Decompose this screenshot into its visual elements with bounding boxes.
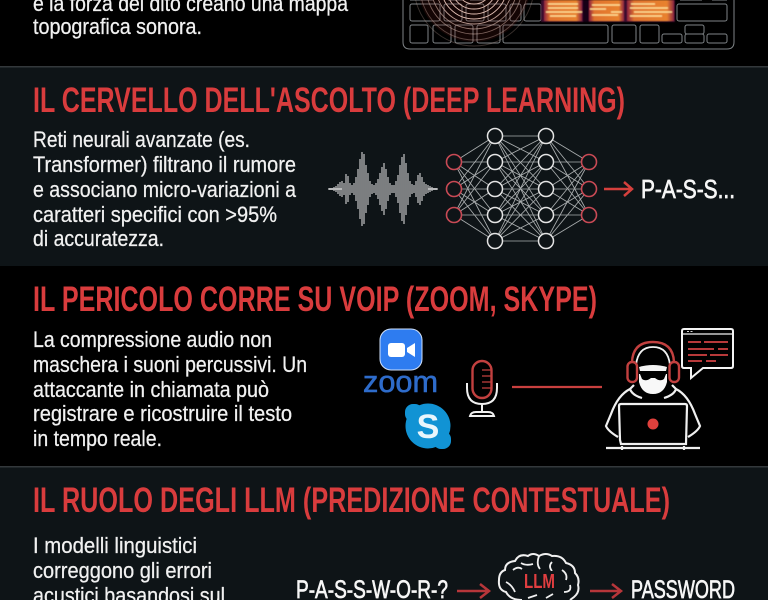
panel: topografia sonora bbox=[0, 0, 768, 66]
fingerprint bbox=[414, 0, 534, 46]
text block: attaccante in chiamata può bbox=[33, 377, 269, 402]
text block: topografia bbox=[33, 0, 349, 39]
text block bbox=[33, 127, 297, 251]
arrow bbox=[590, 584, 621, 598]
chart: neural network bbox=[446, 128, 596, 248]
icon: microphone bbox=[467, 361, 497, 416]
text block: e associano micro-variazioni a bbox=[33, 177, 297, 202]
text block: La compressione audio non bbox=[33, 327, 272, 352]
output text: P-A-S-S... bbox=[641, 174, 735, 204]
text block: topografia: topografica sonora. bbox=[33, 14, 202, 39]
icon: zoom logo bbox=[363, 329, 438, 399]
text block: maschera i suoni percussivi. Un bbox=[33, 352, 307, 377]
heat map bbox=[541, 0, 675, 22]
icon: hacker with headphones bbox=[606, 329, 733, 450]
panel: il ruolo degli llm bbox=[0, 466, 768, 600]
text block: in tempo reale. bbox=[33, 426, 162, 451]
icon: keyboard with heat map bbox=[403, 0, 734, 49]
panel: il cervello dell'ascolto bbox=[0, 66, 768, 266]
text block: di accuratezza. bbox=[33, 226, 164, 251]
arrow bbox=[604, 182, 632, 196]
icon: skype logo: S bbox=[417, 408, 439, 446]
panel: il pericolo corre su voip bbox=[0, 267, 768, 467]
icon: zoom logo: zoom bbox=[363, 364, 438, 399]
text block: I modelli linguistici bbox=[33, 533, 197, 558]
icon: llm brain bbox=[499, 554, 579, 600]
icon: skype logo bbox=[405, 404, 451, 449]
arrow bbox=[457, 584, 489, 598]
icon: sound waveform bbox=[328, 152, 438, 226]
icon: llm brain: LLM bbox=[524, 571, 555, 593]
connector line bbox=[512, 386, 602, 388]
text block: registrare e ricostruire il testo bbox=[33, 401, 292, 426]
text block: caratteri specifici con >95% bbox=[33, 202, 277, 227]
text block: Reti neurali avanzate (es. bbox=[33, 127, 250, 152]
text block bbox=[33, 533, 225, 600]
text block: correggono gli errori bbox=[33, 558, 212, 583]
text block bbox=[33, 327, 307, 451]
text block: Transformer) filtrano il rumore bbox=[33, 152, 296, 177]
